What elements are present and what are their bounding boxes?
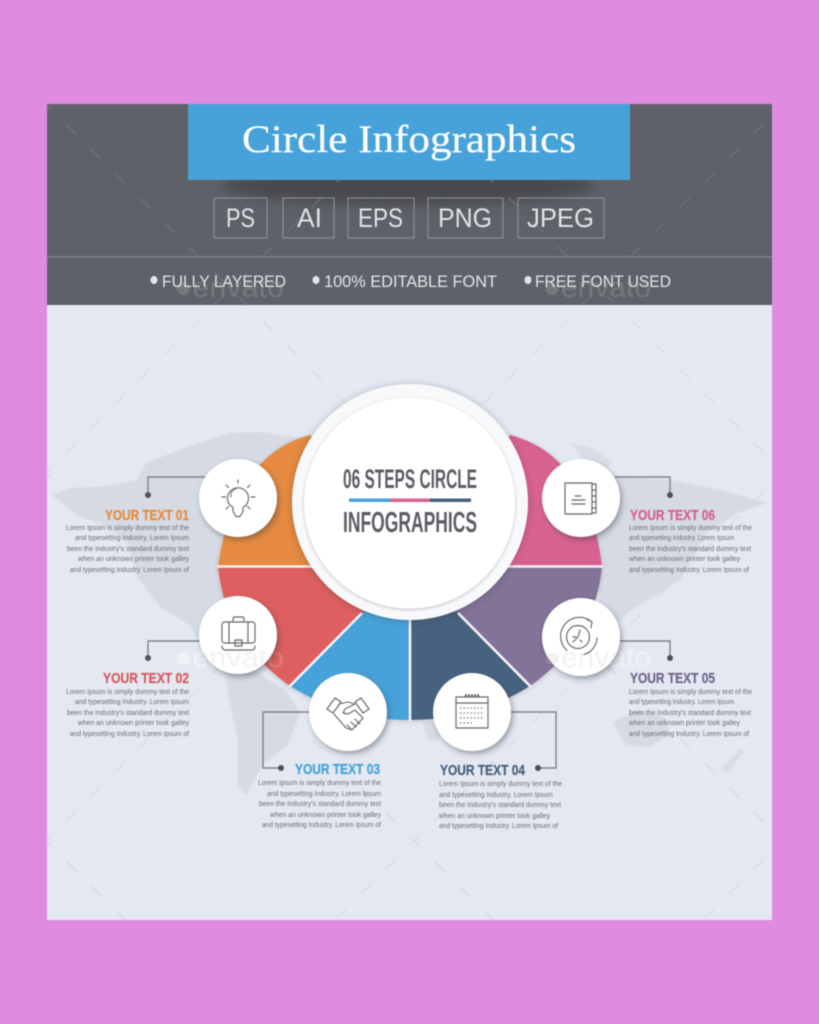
divider [47,256,772,258]
text block 03: and typesetting Industry. Lorem Ipsum of [262,822,381,829]
text block 01: YOUR TEXT 01 [105,508,189,524]
text block 05: when an unknown printer took galley [628,720,740,727]
connector 01 [148,477,205,495]
segment 04 dark blue [410,566,530,720]
badge PNG: PNG [438,203,492,233]
watermark: envato header left: ●envato [174,272,284,304]
text block 06 [628,508,752,574]
text block 02: YOUR TEXT 02 [103,671,189,687]
text block 03: YOUR TEXT 03 [295,762,380,778]
text block 01: and typesetting Industry. Lorem Ipsum of [70,567,189,574]
icon: clock [542,598,620,676]
text block 04: YOUR TEXT 04 [440,763,525,779]
central circle [292,384,528,620]
title banner: Circle Infographics [242,118,576,161]
feature list: FREE FONT USED [535,272,671,291]
badge PNG [428,198,503,238]
text block 04: and typesetting Industry. Lorem Ipsum [439,792,553,799]
text block 05: YOUR TEXT 05 [630,671,715,687]
text block 01 [66,508,189,574]
text block 01: been the Industry's standard dummy text [67,546,189,553]
watermark overlay on segments [174,642,651,674]
text block 03: been the Industry's standard dummy text [259,801,381,808]
connector 03 [263,712,310,768]
text block 02: and typesetting Industry. Lorem Ipsum of [70,731,189,738]
icon: briefcase [199,596,277,674]
watermark overlay on icon circles: ●envato [543,642,651,674]
badge EPS [348,198,414,238]
watermark: envato body left: ●envato [174,642,284,674]
text block 06: been the Industry's standard dummy text [629,546,751,553]
segment 06 pink [410,435,602,566]
text block 02: Lorem Ipsum is simply dummy text of the [66,689,189,696]
center color rule [349,498,471,502]
badge PS [214,198,267,238]
panel: body background [47,305,772,920]
icon: handshake [309,673,387,751]
text block 04 [438,763,562,830]
text block 06: and typesetting Industry. Lorem Ipsum [629,535,734,542]
text block 03: when an unknown printer took galley [269,812,381,819]
segment 01 orange [218,435,410,566]
text block 06: YOUR TEXT 06 [630,508,715,524]
text block 02 [66,671,189,738]
text block 01: when an unknown printer took galley [77,556,189,563]
feature list: 100% EDITABLE FONT [324,272,497,291]
connector 02 [148,641,205,658]
watermark: envato header right: ●envato [543,272,651,304]
text block 03: Lorem Ipsum is simply dummy text of the [258,780,381,787]
connector dots [145,492,673,771]
text block 02: and typesetting Industry. Lorem Ipsum [75,699,189,706]
text block 05: and typesetting Industry. Lorem Ipsum [629,699,734,706]
text block 06: when an unknown printer took galley [628,556,740,563]
watermark overlay on segments: ●envato [174,642,284,674]
text block 05: been the Industry's standard dummy text [629,710,751,717]
panel: header band [46,103,773,306]
text block 06: Lorem Ipsum is simply dummy text of the [629,525,752,532]
segment 05 purple [410,566,602,686]
text block 05: Lorem Ipsum is simply dummy text of the [629,689,752,696]
badge JPEG [518,198,604,238]
diagonal pattern [47,105,764,305]
center heading line 2: INFOGRAPHICS [343,507,477,539]
badge PS: PS [226,203,255,233]
feature list [150,272,671,291]
segment separators [217,566,603,721]
connector 05 [615,641,670,658]
text block 06: and typesetting Industry. Lorem Ipsum of [629,567,749,574]
badge AI: AI [297,203,322,233]
watermark overlay on icon circles [204,649,616,667]
badge AI [283,198,334,238]
diagonal pattern on body [48,306,764,920]
badge JPEG: JPEG [527,203,594,233]
title banner [188,104,630,180]
icon: calendar [433,673,511,751]
segment 03 blue [290,566,410,720]
title shadow [224,180,592,208]
text block 04: been the Industry's standard dummy text [439,802,561,809]
segment 02 red [218,566,410,686]
text block 05: and typesetting Industry. Lorem Ipsum of [629,731,749,738]
format badges [214,198,604,238]
feature list: FULLY LAYERED [162,272,286,291]
center heading line 1: 06 STEPS CIRCLE [343,464,477,494]
text block 01: and typesetting Industry. Lorem Ipsum [75,535,189,542]
text block 05 [628,671,752,738]
watermark overlay on icon circles: ●envato [174,642,284,674]
text block 03 [258,762,381,829]
text block 03: and typesetting Industry. Lorem Ipsum [267,791,381,798]
text block 02: when an unknown printer took galley [77,720,189,727]
icon: light bulb [199,459,277,537]
text block 04: Lorem Ipsum is simply dummy text of the [439,781,562,788]
badge EPS: EPS [358,203,403,233]
connector 04 [510,712,556,768]
connector 06 [615,477,670,495]
text block 04: when an unknown printer took galley [438,813,550,820]
icon: notebook [542,459,620,537]
text block 01: Lorem Ipsum is simply dummy text of the [66,525,189,532]
watermark overlay on segments: ●envato [543,642,651,674]
text block 04: and typesetting Industry. Lorem Ipsum of [439,823,558,830]
text block 02: been the Industry's standard dummy text [67,710,189,717]
watermark: envato body right: ●envato [543,642,651,674]
segmented ring [217,435,603,721]
world map backdrop [52,432,767,795]
